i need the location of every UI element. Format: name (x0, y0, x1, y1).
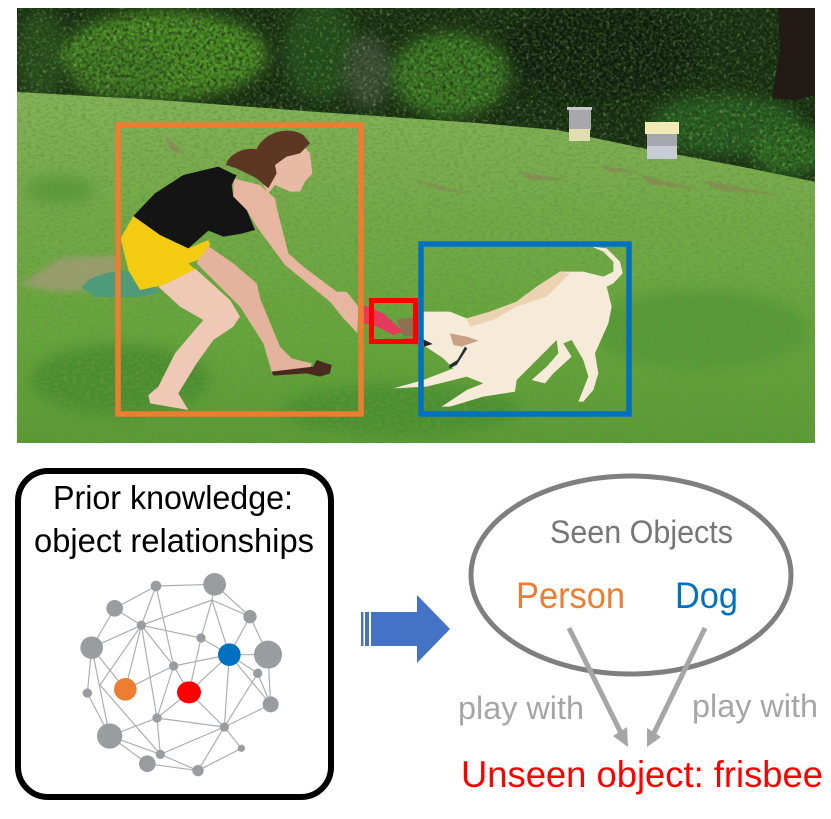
gray graph nodes (80, 573, 282, 776)
orange bounding box: person (118, 125, 361, 414)
woman (121, 131, 358, 410)
graph edges (87, 584, 271, 771)
label: seen objects: Seen Objects (550, 514, 733, 550)
red node: frisbee (177, 681, 201, 703)
knowledge graph (80, 573, 282, 776)
panel heading (34, 479, 314, 559)
panel frame (18, 471, 331, 797)
panel heading: object relationships (34, 522, 314, 559)
green disc on ground (82, 270, 162, 297)
beehive left (567, 107, 592, 141)
arrow: person to frisbee (569, 628, 628, 747)
blue bounding box: dog (421, 244, 629, 414)
label: dog: Dog (675, 575, 738, 616)
panel: prior knowledge (18, 471, 331, 797)
label: play with right: play with (692, 688, 818, 724)
panel heading: Prior knowledge: (53, 479, 293, 516)
icon: blue striped arrow (361, 595, 450, 663)
label: play with left: play with (458, 690, 584, 726)
arrow: dog to frisbee (647, 628, 705, 747)
label: unseen object frisbee: Unseen object: frisbee (461, 754, 823, 795)
red bounding box: frisbee (372, 300, 416, 342)
orange node: person (114, 678, 137, 701)
panel: seen objects ellipse (471, 476, 791, 674)
dog (393, 247, 623, 407)
tree background (16, 0, 830, 188)
tree trunk (772, 8, 815, 100)
label: person: Person (516, 575, 625, 616)
frisbee (364, 305, 418, 344)
grass lawn (17, 90, 817, 445)
photo: woman and dog playing with a frisbee on a lawn (16, 0, 830, 445)
dirt patches (165, 135, 780, 195)
beehive right (645, 122, 679, 159)
blue node: dog (218, 643, 241, 666)
